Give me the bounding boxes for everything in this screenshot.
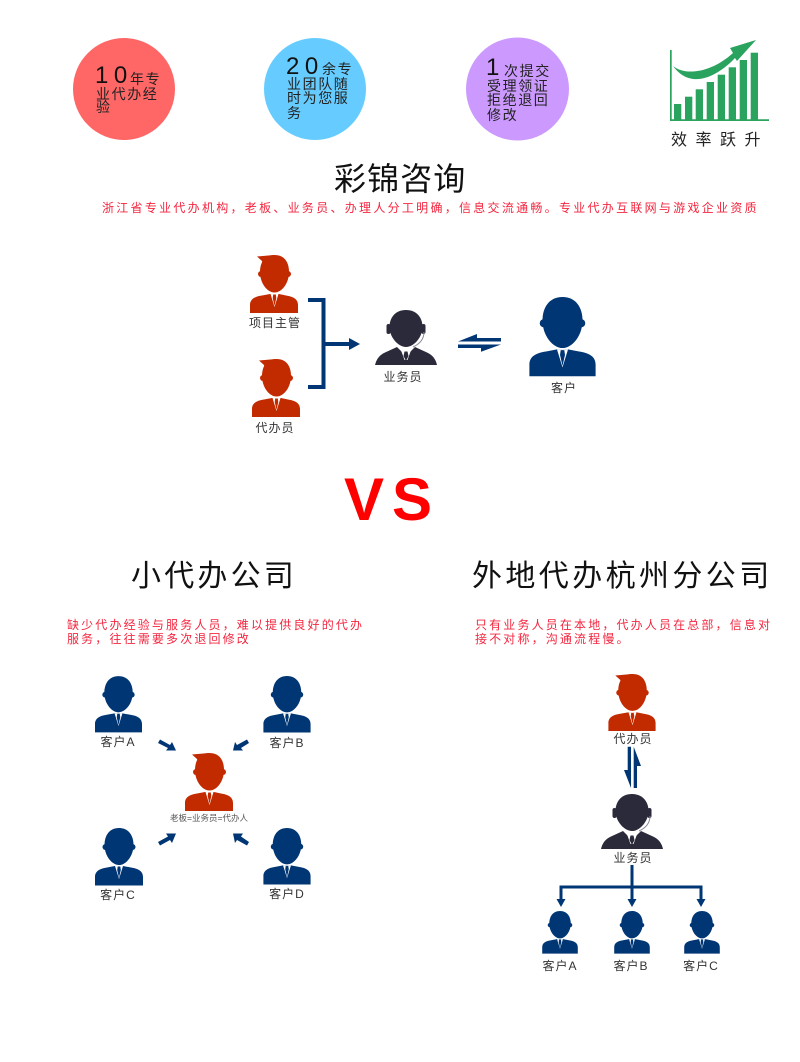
circle: 20 team members: 业团队随 [287, 76, 349, 92]
diagram: small agency [95, 676, 311, 902]
client D [263, 828, 311, 901]
subtitle: 浙江省专业代办机构，老板、业务员、办理人分工明确，信息交流通畅。专业代办互联网与游戏企业资质 [102, 200, 759, 215]
text: small agency description: 服务，往往需要多次退回修改 [67, 631, 251, 646]
circle: 10 years experience: 验 [96, 99, 112, 115]
person: client: 客户 [551, 380, 577, 395]
client A: 客户A [542, 958, 578, 973]
title: 彩锦咨询 [334, 161, 466, 197]
person: agent staff: 代办员 [255, 420, 295, 435]
person: project manager: 项目主管 [249, 315, 301, 330]
circle: 10 years experience [73, 38, 175, 140]
person: agent staff: 代办员 [613, 731, 653, 746]
circle: 20 team members: 20 [286, 53, 324, 80]
circle: one-time approval: 受理领证 [487, 78, 549, 94]
client B [613, 911, 650, 973]
client A [95, 676, 142, 749]
circle: 20 team members: 务 [287, 105, 303, 121]
person: project manager [249, 255, 301, 330]
diagram: our workflow [249, 255, 596, 435]
icon: efficiency chart [670, 40, 769, 149]
circle: 10 years experience: 年专 [130, 71, 161, 87]
client B: 客户B [269, 735, 305, 750]
client C: 客户C [100, 887, 136, 902]
arrow: two-way exchange [458, 334, 501, 352]
client A [542, 911, 578, 973]
heading: small agency: 小代办公司 [131, 560, 297, 593]
client C [683, 911, 720, 973]
arrow: bracket to salesperson [308, 300, 360, 387]
circle: 10 years experience: 业代办经 [96, 86, 158, 102]
person: salesperson: 业务员 [383, 369, 423, 384]
client C [95, 828, 143, 902]
circle: 20 team members: 余专 [322, 61, 353, 77]
text: remote agency description: 接不对称，沟通流程慢。 [475, 631, 631, 646]
circle: one-time approval: 拒绝退回 [487, 92, 549, 108]
arrows toward center [158, 740, 249, 846]
person: salesperson [601, 794, 663, 865]
arrow: branch tree [556, 865, 706, 907]
circle: one-time approval: 修改 [487, 107, 518, 123]
arrow: two-way vertical [624, 747, 641, 788]
heading: remote agency branch: 外地代办杭州分公司 [472, 560, 773, 593]
circle: one-time approval: 次提交 [504, 63, 551, 79]
text: remote agency description: 只有业务人员在本地，代办人员在总部，信息对 [475, 617, 772, 632]
circle: 10 years experience: 10 [95, 62, 133, 89]
central person: 老板=业务员=代办人 [170, 813, 248, 823]
client C: 客户C [683, 958, 719, 973]
text: remote agency description [475, 617, 772, 646]
person: agent staff [252, 359, 300, 435]
person: salesperson [375, 310, 437, 384]
person: client [529, 297, 596, 395]
client D: 客户D [269, 886, 305, 901]
text: small agency description [67, 617, 364, 646]
text: small agency description: 缺少代办经验与服务人员，难以提供良好的代办 [67, 617, 364, 632]
circle: one-time approval [466, 38, 569, 140]
client B: 客户B [613, 958, 649, 973]
client A: 客户A [100, 734, 136, 749]
VS heading: VS [344, 466, 440, 533]
diagram: remote agency [542, 674, 720, 973]
circle: 20 team members [264, 38, 366, 140]
circle: 20 team members: 时为您服 [287, 90, 349, 106]
central person [170, 753, 248, 823]
chart caption: 效率跃升 [671, 131, 769, 149]
person: salesperson: 业务员 [613, 850, 653, 865]
client B [263, 676, 311, 750]
circle: one-time approval: 1 [486, 54, 505, 81]
person: agent staff [608, 674, 656, 746]
